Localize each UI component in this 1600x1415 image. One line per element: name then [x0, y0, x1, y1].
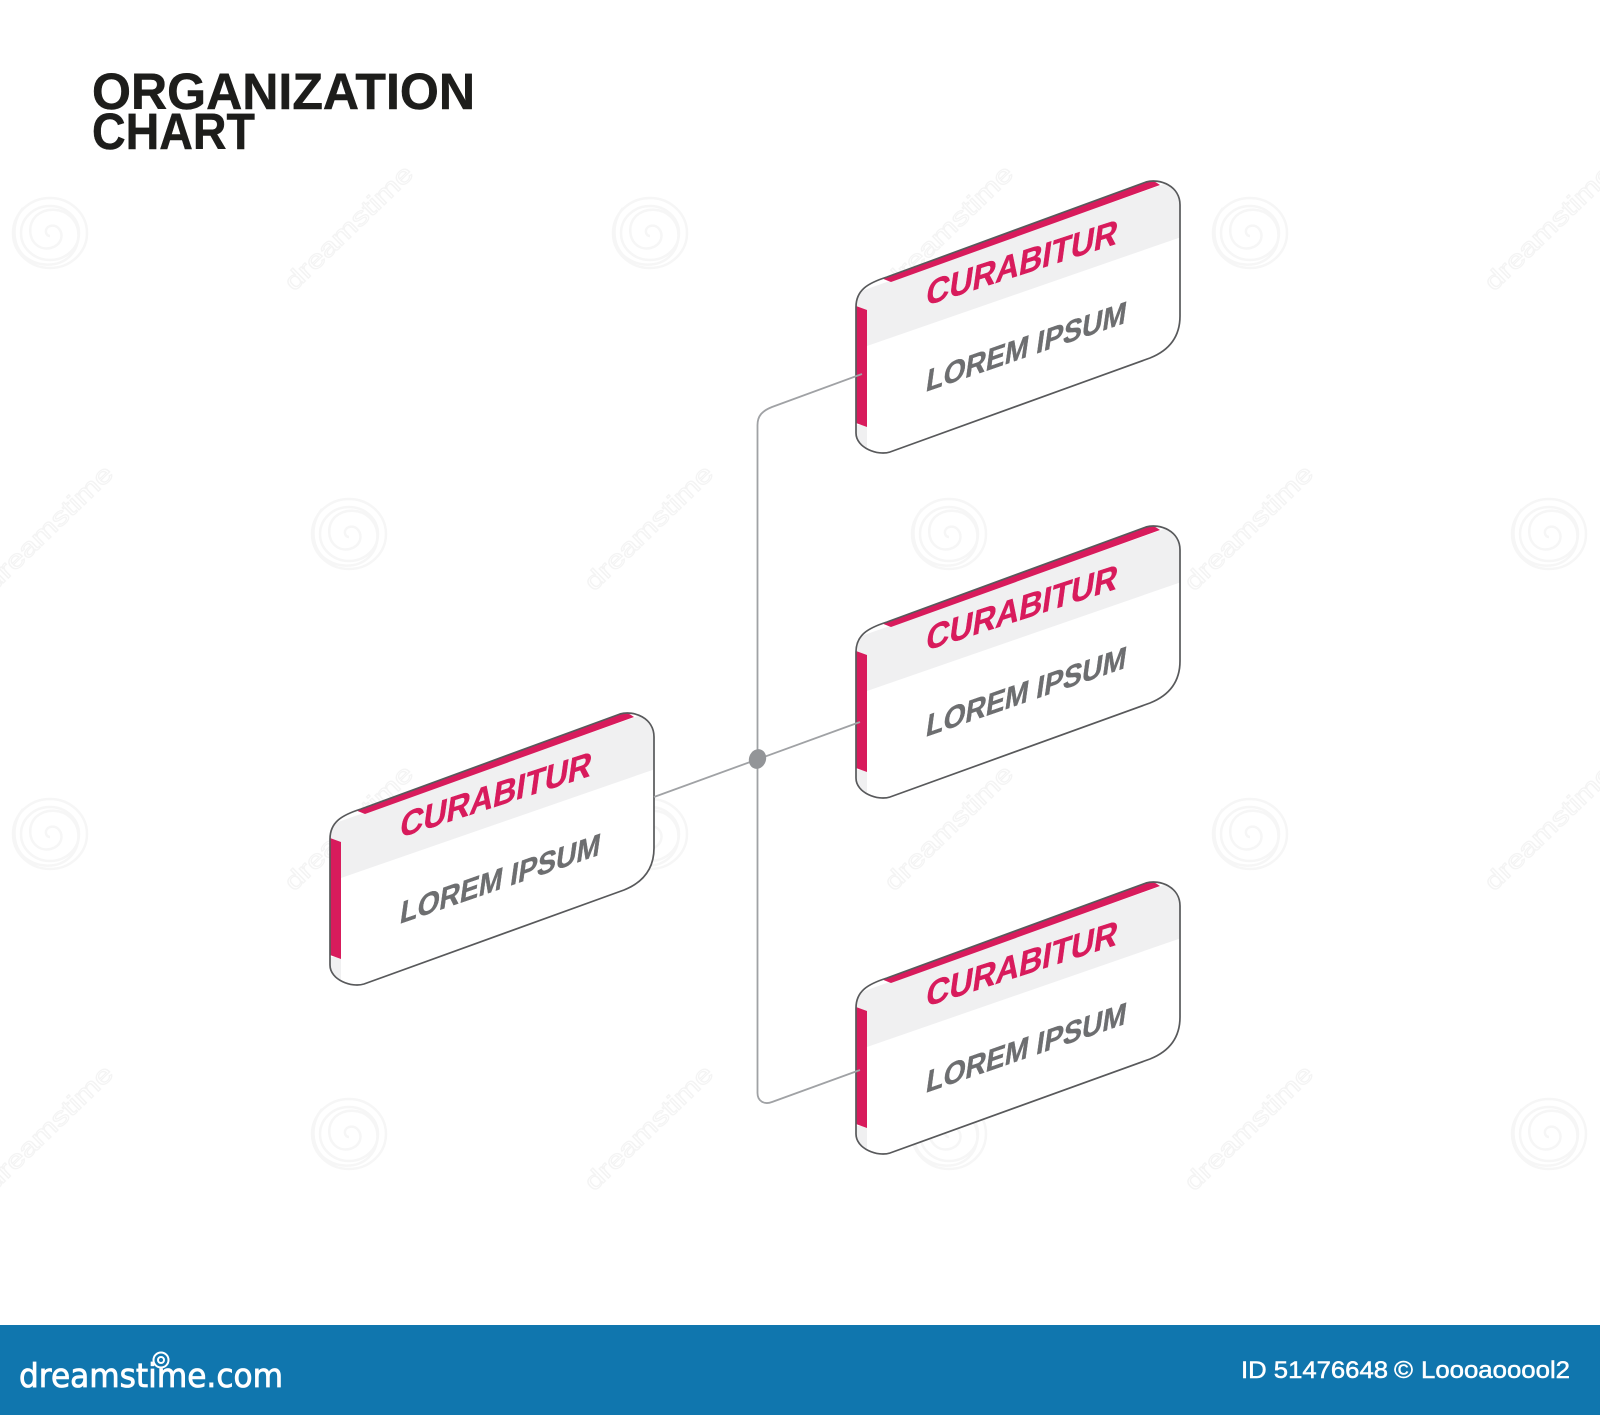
- card: bottom right: LOREM IPSUM: [924, 996, 1129, 1101]
- title: CHART: [92, 103, 255, 160]
- card: middle right: CURABITUR: [924, 556, 1121, 659]
- card: root left: LOREM IPSUM: [398, 827, 603, 932]
- watermark pattern: [0, 159, 1600, 1196]
- footer logo text: dreamstime.com: [19, 1356, 283, 1395]
- card: root left: CURABITUR: [398, 743, 595, 846]
- card: root left: [329, 712, 655, 986]
- card: top right: LOREM IPSUM: [924, 295, 1129, 400]
- card: middle right: [855, 525, 1181, 799]
- footer image id and credit: ©: [1394, 1357, 1413, 1384]
- footer image id and credit: Loooaooool2: [1421, 1357, 1570, 1384]
- card: bottom right: [855, 881, 1181, 1155]
- junction dot: [746, 747, 769, 771]
- footer image id and credit: ID 51476648: [1241, 1357, 1388, 1384]
- title: ORGANIZATION: [92, 63, 475, 120]
- card: top right: CURABITUR: [924, 211, 1121, 314]
- footer image id and credit: [1241, 1357, 1570, 1384]
- footer logo spiral icon: [154, 1352, 168, 1368]
- card: middle right: LOREM IPSUM: [924, 640, 1129, 745]
- title: [92, 63, 475, 160]
- card: bottom right: CURABITUR: [924, 912, 1121, 1015]
- card: top right: [855, 180, 1181, 454]
- connector lines: [654, 374, 862, 1103]
- footer bar: [0, 1325, 1600, 1415]
